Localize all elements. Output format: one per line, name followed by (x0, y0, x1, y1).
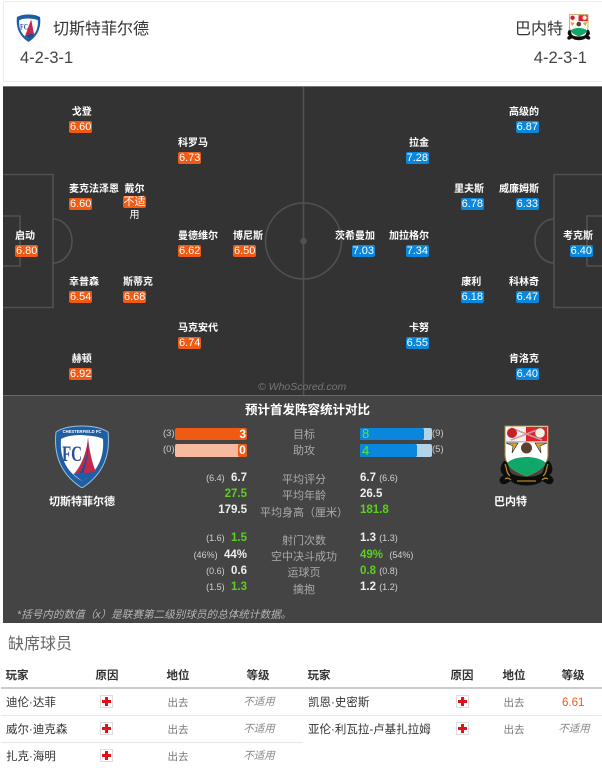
player: 科林奇: 科林奇 (509, 277, 539, 288)
player: 卡努: 6.55 (407, 337, 428, 349)
panel: pitch (3, 86, 602, 395)
player: 茨希曼加: 7.03 (353, 245, 374, 257)
row: 扎克·海明: 不适用 (243, 750, 275, 762)
player: 马克安代: 6.74 (179, 337, 200, 349)
stat: tackles: 擒抱 (293, 584, 315, 596)
stat: shots: 1.3 (1.3) (360, 532, 398, 544)
stat: average age (225, 488, 382, 502)
stat: tackles: 1.2 (1.2) (360, 581, 398, 593)
row: 威尔·迪克森: 威尔·迪克森 (6, 724, 67, 736)
bar: goals home: 3 (239, 427, 246, 441)
stat: average rating: 平均评分 (282, 474, 326, 486)
row: 扎克·海明: 扎克·海明 (6, 751, 56, 763)
player: 戴尔 (123, 183, 146, 221)
player: 幸普森: 6.54 (70, 291, 91, 303)
row: 亚伦·利瓦拉-卢基扎拉姆: 出去 (504, 724, 524, 736)
stats heading: 预计首发阵容统计对比 (245, 403, 370, 417)
player: 高级的: 高级的 (509, 107, 539, 118)
player: 里夫斯: 里夫斯 (454, 184, 484, 195)
player: 加拉格尔 (389, 230, 429, 257)
player: 里夫斯: 6.78 (462, 198, 483, 210)
stat: average rating: (6.4) 6.7 (206, 472, 247, 484)
bar: goals away: (9) (432, 428, 444, 439)
icon: Chesterfield crest large (55, 426, 109, 488)
player: 里夫斯 (454, 183, 484, 210)
icon: Chesterfield crest large: FC (62, 441, 82, 466)
player: 斯蒂克: 6.68 (124, 291, 145, 303)
stat: dribbles: (0.6) 0.6 (206, 565, 247, 577)
footnote: *括号内的数值（x）是联赛第二级别球员的总体统计数据。 (17, 609, 291, 621)
player: 启动: 6.80 (16, 245, 37, 257)
player: 考克斯: 考克斯 (563, 231, 593, 242)
player: 马克安代 (178, 322, 218, 349)
player: 康利 (461, 276, 484, 303)
icon: Barnet crest large (500, 426, 554, 486)
header: status: 地位 (502, 670, 526, 682)
player: 茨希曼加: 茨希曼加 (335, 231, 375, 242)
player: 威廉姆斯: 6.33 (517, 198, 538, 210)
label: goals: 目标 (293, 429, 315, 441)
row: 凯恩·史密斯 (301, 689, 602, 715)
stat: shots (206, 532, 398, 547)
player: 博尼斯: 博尼斯 (233, 231, 263, 242)
header: status: 地位 (166, 670, 190, 682)
header: rating: 等级 (562, 670, 584, 682)
player: 加拉格尔: 加拉格尔 (389, 231, 429, 242)
row: 扎克·海明: 出去 (168, 751, 188, 763)
icon: Chesterfield crest small: FC (20, 22, 28, 32)
formation: Chesterfield: 4-2-3-1 (20, 49, 73, 67)
stat: tackles (206, 581, 398, 596)
player: 拉金: 拉金 (409, 138, 429, 149)
bar: goals home (163, 427, 247, 441)
team name: Barnet: 巴内特 (515, 21, 563, 38)
player: 卡努: 卡努 (409, 323, 429, 334)
player: 麦克法泽恩: 6.60 (70, 198, 91, 210)
player: 考克斯 (563, 230, 593, 257)
row: 迪伦·达菲: 出去 (168, 697, 188, 709)
team label: Barnet: 巴内特 (494, 496, 527, 508)
row: 迪伦·达菲: 迪伦·达菲 (6, 697, 56, 709)
player: 启动 (15, 230, 38, 257)
icon: Chesterfield crest large: CHESTERFIELD FC (63, 429, 101, 434)
player: 茨希曼加 (335, 230, 375, 257)
player: 启动: 启动 (15, 231, 35, 242)
bar: assists home: 0 (239, 443, 246, 457)
stat: average height: 平均身高（厘米） (260, 507, 348, 519)
player: 拉金 (406, 136, 429, 164)
player: 曼德维尔: 6.62 (179, 245, 200, 257)
player: 幸普森: 幸普森 (69, 277, 99, 288)
row: 威尔·迪克森 (0, 716, 301, 742)
panel: statistics comparison (3, 395, 602, 623)
header: rating: 等级 (246, 670, 270, 682)
row: 凯恩·史密斯: 6.61 (562, 697, 584, 709)
player: 威廉姆斯: 威廉姆斯 (499, 184, 539, 195)
stat: aerial duels: 49% (54%) (360, 549, 413, 561)
player: 科罗马: 科罗马 (178, 138, 208, 149)
label: assists: 助攻 (293, 445, 315, 457)
player: 麦克法泽恩: 麦克法泽恩 (69, 184, 119, 195)
stat: average height: 179.5 (218, 504, 247, 516)
player: 赫顿: 赫顿 (72, 354, 92, 365)
player: 麦克法泽恩 (69, 183, 119, 210)
stat: average age: 平均年龄 (282, 490, 326, 502)
watermark: © WhoScored.com (258, 381, 346, 393)
row: 威尔·迪克森: 出去 (168, 724, 188, 736)
player: 科林奇 (509, 276, 539, 303)
table: absentees home (1, 669, 303, 763)
icon: Barnet crest small (567, 14, 590, 40)
header: reason: 原因 (96, 670, 118, 682)
player: 马克安代: 马克安代 (178, 323, 218, 334)
player: 斯蒂克 (123, 276, 153, 303)
row: 亚伦·利瓦拉-卢基扎拉姆: 不适用 (558, 723, 590, 735)
heading: absent players: 缺席球员 (8, 636, 72, 653)
row: 凯恩·史密斯: 凯恩·史密斯 (308, 697, 369, 709)
stat: shots: (1.6) 1.5 (206, 532, 247, 544)
player: 威廉姆斯 (499, 183, 539, 210)
bar: goals away (360, 426, 444, 441)
stat: average rating: 6.7 (6.6) (360, 472, 398, 484)
player: 康利: 6.18 (462, 291, 483, 303)
bar: assists away: 4 (362, 443, 369, 458)
player: 曼德维尔 (178, 230, 218, 257)
row: 亚伦·利瓦拉-卢基扎拉姆: 亚伦·利瓦拉-卢基扎拉姆 (308, 724, 431, 736)
row: 迪伦·达菲: 不适用 (243, 696, 275, 708)
formation: Barnet: 4-2-3-1 (534, 49, 587, 67)
bar: assists away (360, 443, 444, 458)
player: 戈登: 戈登 (72, 107, 92, 118)
player: 戈登: 6.60 (70, 121, 91, 133)
player: 博尼斯: 6.50 (234, 245, 255, 257)
row: 亚伦·利瓦拉-卢基扎拉姆 (301, 716, 602, 742)
player: 加拉格尔: 7.34 (407, 245, 428, 257)
stat: aerial duels: 空中决斗成功 (271, 551, 337, 563)
player: 赫顿: 6.92 (70, 368, 91, 380)
player: 曼德维尔: 曼德维尔 (178, 231, 218, 242)
panel: match header (3, 1, 602, 82)
player: 科林奇: 6.47 (517, 291, 538, 303)
player: 博尼斯 (233, 230, 263, 257)
stat: average height (218, 504, 389, 519)
player: 拉金: 7.28 (407, 152, 428, 164)
player: 肯洛克: 6.40 (517, 368, 538, 380)
bar: goals away: 8 (362, 426, 369, 441)
stat: average height: 181.8 (360, 504, 389, 516)
player: 卡努 (406, 322, 429, 349)
player: 科罗马: 6.73 (179, 152, 200, 164)
stat: dribbles: 0.8 (0.8) (360, 565, 398, 577)
team label: Chesterfield: 切斯特菲尔德 (49, 496, 115, 508)
table: absentees away (301, 665, 602, 743)
player: 肯洛克: 肯洛克 (509, 354, 539, 365)
row: 迪伦·达菲 (6, 695, 276, 709)
row: 威尔·迪克森: 不适用 (243, 723, 275, 735)
stat: aerial duels (194, 549, 413, 563)
bar: assists away: (5) (432, 444, 444, 455)
stat: average rating (206, 472, 398, 486)
bar: assists home (163, 443, 247, 457)
player: 戈登 (69, 106, 92, 133)
pitch markings (3, 87, 602, 395)
player: 科罗马 (178, 137, 208, 164)
stat: dribbles (206, 565, 398, 579)
stat: tackles: (1.5) 1.3 (206, 581, 247, 593)
stat: average age: 26.5 (360, 488, 382, 500)
player: 戴尔: 戴尔 (124, 184, 144, 195)
bar: goals home: (3) (163, 428, 175, 439)
player: 斯蒂克: 斯蒂克 (123, 277, 153, 288)
player: 幸普森 (69, 276, 99, 303)
row: 凯恩·史密斯: 出去 (504, 697, 524, 709)
stat: average age: 27.5 (225, 488, 247, 500)
player: 肯洛克 (509, 353, 539, 380)
player: 戴尔: 用 (130, 210, 140, 221)
team name: Chesterfield: 切斯特菲尔德 (53, 21, 149, 38)
player: 戴尔: 不适 (124, 196, 146, 208)
stat: shots: 射门次数 (282, 535, 326, 547)
header: reason: 原因 (450, 670, 474, 682)
player: 赫顿 (69, 353, 92, 380)
player: 高级的 (509, 106, 539, 133)
player: 考克斯: 6.40 (571, 245, 592, 257)
header: player: 玩家 (308, 670, 330, 682)
row: 扎克·海明 (0, 743, 301, 769)
stat: aerial duels: (46%) 44% (194, 549, 247, 561)
header: player: 玩家 (6, 670, 28, 682)
icon: Chesterfield crest small (16, 14, 40, 42)
bar: assists home: (0) (163, 444, 175, 455)
player: 康利: 康利 (461, 277, 481, 288)
stat: dribbles: 运球页 (288, 567, 320, 579)
player: 高级的: 6.87 (517, 121, 538, 133)
